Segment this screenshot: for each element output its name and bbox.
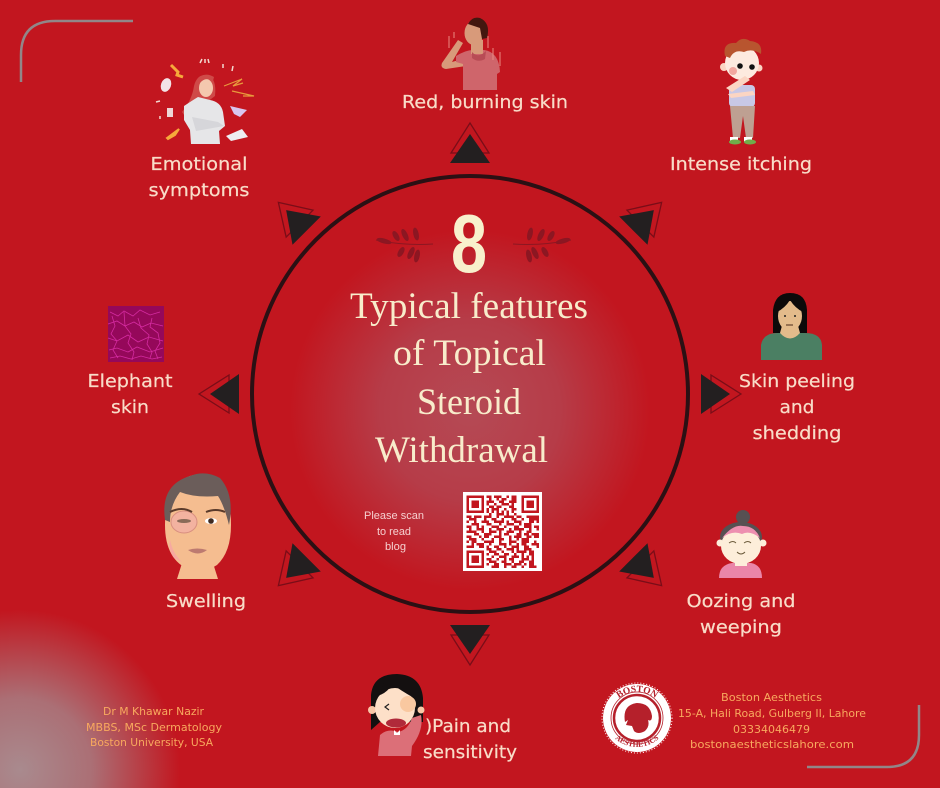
icon: upset woman with symbols (156, 59, 254, 144)
icon: man with burning skin (442, 18, 500, 90)
author credit: Boston University, USA (90, 736, 213, 749)
icon: girl rubbing eye (368, 674, 424, 756)
bottom-left glow (0, 600, 190, 788)
label: Elephant (88, 371, 172, 392)
label: Red, burning skin (402, 92, 568, 113)
label (423, 716, 517, 763)
icon: woman in green top (761, 293, 822, 360)
label: )Pain and (425, 716, 511, 737)
label: sensitivity (423, 742, 517, 763)
author credit: MBBS, MSc Dermatology (86, 721, 222, 734)
arrow: upper left (264, 188, 321, 245)
scan prompt: Please scan (364, 510, 424, 522)
arrow: lower left (264, 543, 321, 600)
icon: right branch (513, 228, 571, 262)
scan prompt: to read (377, 526, 411, 538)
label: Skin peeling (739, 371, 855, 392)
logo: Boston Aesthetics: BOSTON (616, 686, 659, 698)
arrow: right (701, 374, 741, 414)
label: skin (111, 397, 149, 418)
arrow: lower right (619, 543, 676, 600)
label (148, 154, 250, 201)
arrow: up (450, 123, 490, 163)
icon: face with swollen eye (164, 473, 231, 579)
clinic contact details: Boston Aesthetics (721, 691, 822, 704)
author credit: Dr M Khawar Nazir (103, 705, 204, 718)
label (739, 371, 855, 444)
feature: skin peeling and shedding (739, 293, 855, 444)
scan prompt (364, 510, 424, 553)
icon: left branch (376, 228, 433, 262)
label: symptoms (148, 180, 250, 201)
central circle (252, 176, 688, 612)
clinic contact details: 03334046479 (733, 723, 810, 736)
feature: intense itching (670, 39, 812, 175)
feature: elephant skin (88, 306, 172, 418)
title: Withdrawal (375, 430, 548, 471)
clinic contact details: bostonaestheticslahore.com (690, 738, 854, 751)
label (686, 591, 796, 638)
label: shedding (752, 423, 842, 444)
QR code (463, 492, 542, 571)
title: Steroid (417, 382, 521, 423)
logo: Boston Aesthetics (602, 682, 672, 754)
corner bracket: top left (21, 21, 133, 82)
arrow: down (450, 625, 490, 665)
icon: girl with hair bun (716, 510, 766, 578)
feature: red, burning skin (402, 18, 568, 113)
clinic contact details: 15-A, Hali Road, Gulberg II, Lahore (678, 707, 866, 720)
icon: boy scratching (720, 39, 762, 144)
label: Emotional (150, 154, 248, 175)
scan prompt: blog (385, 541, 406, 553)
label: Swelling (166, 591, 246, 612)
icon: cracked skin swatch (108, 306, 164, 362)
label: Intense itching (670, 154, 812, 175)
arrow: upper right (619, 188, 676, 245)
title: of Topical (393, 333, 546, 374)
author credit (86, 705, 222, 749)
title (350, 286, 588, 471)
arrow: left (199, 374, 239, 414)
label: weeping (700, 617, 782, 638)
label (88, 371, 172, 418)
logo: Boston Aesthetics: AESTHETICS (615, 735, 658, 747)
label: and (780, 397, 814, 418)
feature: emotional symptoms (148, 59, 254, 201)
feature: pain and sensitivity (368, 674, 517, 763)
label: Oozing and (686, 591, 796, 612)
title: Typical features (350, 286, 588, 327)
numeral 8: 8 (451, 197, 487, 290)
corner bracket: bottom right (807, 705, 919, 767)
clinic contact details (678, 691, 866, 751)
feature: swelling (164, 473, 246, 612)
feature: oozing and weeping (686, 510, 796, 638)
